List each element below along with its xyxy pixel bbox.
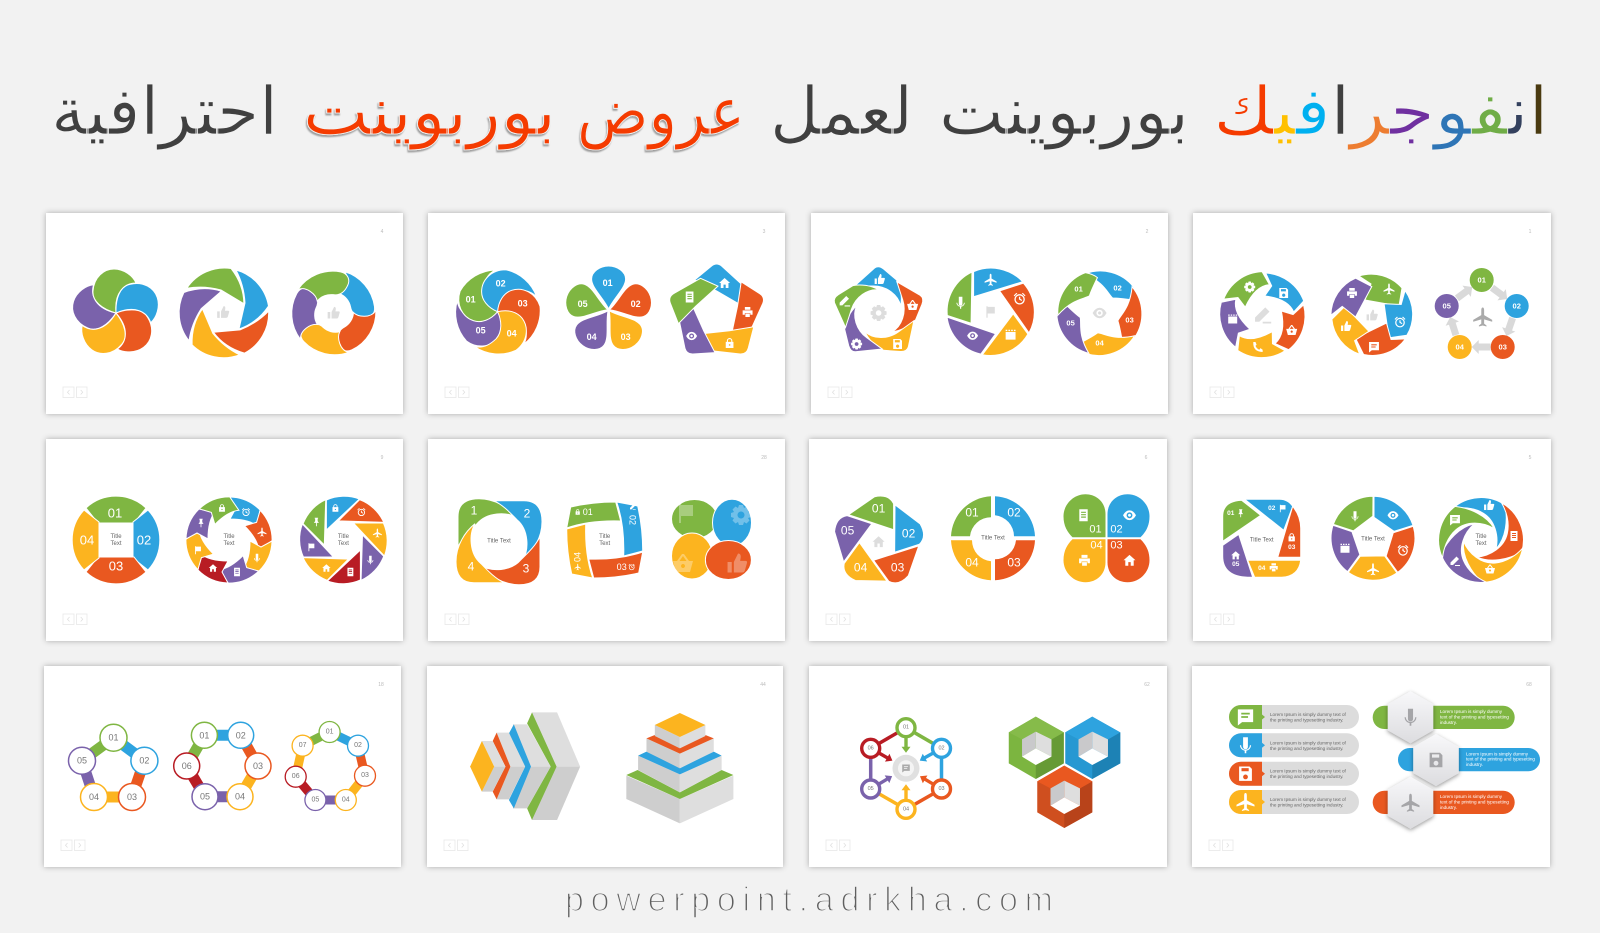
nav buttons <box>444 840 468 850</box>
five node chain: 01 <box>108 733 119 743</box>
numbered petals: 01 <box>603 278 613 288</box>
shutter circle <box>163 257 279 374</box>
row mic <box>1229 733 1359 757</box>
slide card <box>1193 213 1551 414</box>
numbered petals <box>562 266 656 356</box>
page number: 44 <box>760 682 766 688</box>
hexagon node cycle: 01 <box>903 725 909 731</box>
rounded square shutter <box>456 499 542 585</box>
seven node chain: 01 <box>326 728 334 736</box>
squircle with pentagon hole: 03 <box>1288 544 1296 551</box>
node cycle with arrows: 01 <box>1478 276 1486 284</box>
six node chain: 03 <box>253 761 263 771</box>
stepped arrow <box>470 712 580 820</box>
nav buttons <box>828 387 852 398</box>
panel: slide 3 <box>428 213 785 414</box>
panel: slide 6 <box>809 439 1167 641</box>
panel: slide 9 <box>46 439 403 641</box>
row plane <box>1229 790 1359 814</box>
numbered swirl <box>441 262 550 369</box>
star hole circle: 02 <box>1113 284 1122 292</box>
four quarter ring: Title Text <box>981 535 1005 541</box>
panel: slide 28 <box>428 439 785 641</box>
panel: slide 44 <box>427 666 783 867</box>
node cycle with arrows <box>1435 268 1529 359</box>
page number: 28 <box>761 455 767 461</box>
hex row red: text of the printing and typesetting <box>1440 799 1509 804</box>
seven node chain: 06 <box>292 773 300 780</box>
four segment ring: Title <box>110 534 122 540</box>
hex row blue: Lorem Ipsum is simply dummy <box>1466 751 1529 756</box>
four segment ring: 02 <box>137 532 151 548</box>
page number: 62 <box>1144 682 1150 688</box>
panel: slide 68 <box>1192 666 1550 867</box>
seven node chain: 05 <box>312 796 319 804</box>
hexagon plane <box>1388 777 1433 829</box>
numbered swirl: 01 <box>466 295 476 305</box>
row chat: Lorem Ipsum is simply dummy text of <box>1270 712 1347 717</box>
curved square ring: Text <box>599 541 611 547</box>
squircle with pentagon hole: Title Text <box>1250 537 1274 543</box>
nav buttons <box>445 614 469 624</box>
thin swirl circle: Title <box>1475 534 1487 540</box>
four segment ring: Text <box>110 541 122 547</box>
star ring <box>1324 274 1420 366</box>
hexagon node cycle: 06 <box>868 745 874 751</box>
hex row red <box>1373 791 1515 814</box>
squircle with pentagon hole: 01 <box>1227 510 1235 517</box>
five node chain: 05 <box>77 756 87 766</box>
star hole circle: 05 <box>1066 318 1075 328</box>
four overlapping circles <box>672 499 752 580</box>
panel: slide 2 <box>811 213 1168 414</box>
row chat <box>1229 705 1359 729</box>
eight blade shutter <box>300 496 387 584</box>
four segment ring <box>72 496 160 584</box>
nav buttons <box>1210 387 1234 398</box>
page number: 6 <box>1145 455 1148 461</box>
rounded square shutter: 3 <box>523 562 530 576</box>
six node chain: 01 <box>199 730 209 740</box>
squircle with pentagon hole <box>1223 499 1301 577</box>
numbered swirl: 05 <box>476 326 486 336</box>
nav buttons <box>826 614 850 624</box>
star hole circle: 01 <box>1074 284 1083 294</box>
hexagon mic <box>1388 691 1433 743</box>
hex row red: industry. <box>1440 805 1457 810</box>
numbered petals: 05 <box>578 299 588 309</box>
hexagon node cycle: 04 <box>903 806 909 812</box>
row mic: the printing and typesetting industry. <box>1270 746 1343 751</box>
slide card <box>44 666 401 867</box>
numbered swirl: 03 <box>518 299 528 309</box>
four quarter ring: 03 <box>1007 555 1021 569</box>
six node chain: 02 <box>236 730 246 740</box>
pentagon swirl <box>827 267 930 365</box>
nav buttons <box>61 840 85 850</box>
seven node chain: 07 <box>299 742 307 749</box>
rounded square shutter: 1 <box>471 504 478 518</box>
four quarter ring: 04 <box>965 555 979 569</box>
pentagon shutter: 01 <box>872 502 886 516</box>
hex row blue: industry. <box>1466 762 1483 767</box>
curved square ring: 03 <box>617 562 627 572</box>
slide card <box>1193 439 1551 641</box>
rounded square shutter: Title Text <box>487 539 511 545</box>
rounded square shutter: 2 <box>524 507 531 521</box>
nav buttons <box>1210 614 1234 624</box>
seven node chain <box>285 722 376 810</box>
title word: infographic, multicoloured: انفوجرافيك <box>1214 73 1548 150</box>
hex row blue: text of the printing and typesetting <box>1466 757 1535 762</box>
eight chevron ring: Title <box>223 534 235 540</box>
stepped pyramid <box>626 713 733 823</box>
row save <box>1229 762 1359 786</box>
pentagon shutter: 04 <box>854 561 868 575</box>
curved square ring: Title <box>599 534 611 540</box>
six node chain: 06 <box>182 761 192 771</box>
four segment ring: 04 <box>80 532 94 548</box>
node cycle with arrows: 05 <box>1443 302 1451 310</box>
row chat: the printing and typesetting industry. <box>1270 718 1343 722</box>
six node chain <box>174 722 271 810</box>
pentagon shutter: 05 <box>841 524 855 538</box>
title word: powerpoint: بوربوينت <box>939 73 1189 150</box>
row save: Lorem Ipsum is simply dummy text of <box>1270 769 1347 774</box>
panel: slide 4 <box>46 213 403 414</box>
numbered petals: 02 <box>631 299 641 309</box>
hex row green <box>1373 706 1515 729</box>
curved square ring: 04 <box>573 552 583 562</box>
numbered petals: 03 <box>621 332 631 342</box>
slide card <box>809 439 1167 641</box>
four petal clover: 02 <box>1110 523 1123 535</box>
page number: 5 <box>1529 455 1532 461</box>
seven node chain: 03 <box>361 772 369 779</box>
hexagon node cycle <box>862 719 950 818</box>
node cycle with arrows: 03 <box>1499 342 1507 352</box>
swirl flower <box>67 269 164 362</box>
four quarter ring <box>951 496 1035 580</box>
four quarter ring: 01 <box>965 505 979 519</box>
star hole circle <box>1047 267 1150 367</box>
numbered petals: 04 <box>587 332 597 342</box>
hexagon save <box>1413 734 1459 786</box>
star hole circle: 03 <box>1125 316 1134 324</box>
page number: 4 <box>381 229 384 235</box>
hex row red: Lorem Ipsum is simply dummy <box>1440 794 1503 799</box>
node cycle with arrows: 04 <box>1456 342 1465 352</box>
star hole circle: 04 <box>1095 338 1105 348</box>
numbered swirl: 04 <box>507 329 517 339</box>
four petal clover: 03 <box>1110 539 1123 551</box>
slide card <box>428 213 785 414</box>
page number: 68 <box>1526 682 1532 688</box>
four petal clover <box>1064 494 1150 582</box>
footer website: powerpoint.adrkha.com <box>565 881 1053 919</box>
nav buttons <box>445 387 469 398</box>
hexagon node cycle: 05 <box>868 786 874 792</box>
slide card <box>46 439 403 641</box>
four quarter ring: 02 <box>1007 505 1021 519</box>
hex row blue <box>1398 748 1540 771</box>
row plane: the printing and typesetting industry. <box>1270 802 1343 808</box>
page number: 1 <box>1529 229 1532 235</box>
pentagon hole circle: Title Text <box>1361 536 1385 542</box>
squircle with pentagon hole: 05 <box>1232 561 1240 568</box>
five node chain: 02 <box>139 756 149 766</box>
title word: presentations: عروض <box>577 73 745 151</box>
row save: the printing and typesetting industry. <box>1270 774 1343 779</box>
node cycle with arrows: 02 <box>1513 302 1521 310</box>
thin swirl circle: Text <box>1475 541 1487 547</box>
panel: slide 62 <box>809 666 1167 867</box>
nav buttons <box>826 840 850 850</box>
title word: to make: لعمل <box>770 73 913 150</box>
panel: slide 18 <box>44 666 401 867</box>
seven node chain: 02 <box>354 742 362 749</box>
four segment ring: 01 <box>108 506 122 520</box>
hex row green: industry. <box>1440 720 1457 725</box>
nav buttons <box>1209 840 1233 850</box>
page number: 2 <box>1146 229 1149 235</box>
slide card <box>809 666 1167 867</box>
pentagon shutter: 02 <box>902 527 916 541</box>
row mic: Lorem Ipsum is simply dummy text of <box>1270 740 1347 745</box>
slide card <box>811 213 1168 414</box>
nav buttons <box>63 614 87 624</box>
row plane: Lorem Ipsum is simply dummy text of <box>1270 797 1347 802</box>
title word: professional: احترافية <box>51 73 278 150</box>
shutter circle with icons <box>939 268 1042 366</box>
hexagon node cycle: 02 <box>938 745 945 751</box>
pentagon shutter <box>826 496 930 596</box>
slide card <box>427 666 783 867</box>
curved square ring: 01 <box>583 507 593 517</box>
slide card <box>1192 666 1550 867</box>
title <box>51 73 1548 151</box>
seven node chain: 04 <box>342 796 350 804</box>
hex row green: Lorem Ipsum is simply dummy <box>1440 709 1503 714</box>
six node chain: 04 <box>235 792 245 802</box>
panel: slide 1 <box>1193 213 1551 414</box>
four petal clover: 04 <box>1090 539 1103 551</box>
nav buttons <box>63 387 87 398</box>
curved square ring: 02 <box>628 515 638 525</box>
slide card <box>46 213 403 414</box>
squircle with pentagon hole: 04 <box>1258 565 1266 572</box>
pentagon shutter: 03 <box>891 561 905 575</box>
curved square ring <box>567 502 643 578</box>
eight chevron ring: Text <box>223 541 235 547</box>
thin swirl circle <box>1432 498 1529 591</box>
eight blade shutter: Text <box>338 541 349 547</box>
eight chevron ring <box>177 488 281 592</box>
hexagon node cycle: 03 <box>938 786 945 792</box>
page number: 3 <box>763 229 766 235</box>
six node chain: 05 <box>200 792 210 802</box>
pentagon hole circle <box>1316 487 1425 596</box>
slide card <box>428 439 785 641</box>
four segment ring: 03 <box>109 558 123 574</box>
squircle with pentagon hole: 02 <box>1268 505 1276 512</box>
five node chain: 04 <box>89 792 99 802</box>
left list rows <box>1229 705 1359 814</box>
three isometric hexagons <box>1009 717 1120 828</box>
five node chain <box>68 724 158 810</box>
pentagon with icons <box>663 264 772 369</box>
panel: slide 5 <box>1193 439 1551 641</box>
eight blade shutter: Title <box>338 534 350 540</box>
numbered swirl: 02 <box>496 279 506 289</box>
rounded square shutter: 4 <box>468 560 475 574</box>
four petal clover: 01 <box>1089 523 1102 535</box>
chevron ring <box>1205 263 1315 373</box>
five node chain: 03 <box>127 792 137 802</box>
right hexagon rows <box>1373 691 1540 829</box>
rounded blades circle <box>276 261 385 370</box>
hex row green: text of the printing and typesetting <box>1440 714 1509 719</box>
page number: 18 <box>378 682 384 688</box>
page number: 9 <box>381 455 384 461</box>
title word: powerpoint red: بوربوينت <box>303 73 556 150</box>
